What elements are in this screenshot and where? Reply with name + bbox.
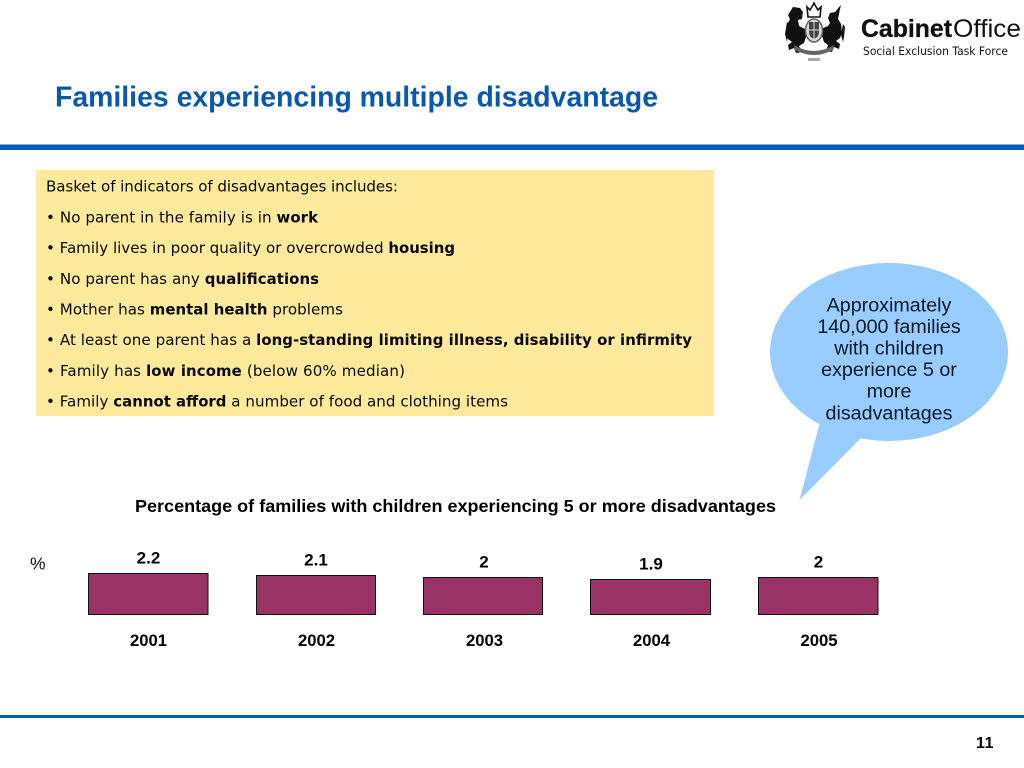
indicator: work: • No parent in the family is in work — [46, 208, 319, 226]
panel heading: Basket of indicators of disadvantages includes: — [46, 178, 398, 196]
right tail — [841, 24, 845, 42]
bottom rule — [0, 715, 1024, 718]
bar: 2005: 2005 — [800, 631, 838, 650]
callout text: experience 5 or — [821, 359, 957, 381]
title: Families experiencing multiple disadvantage — [55, 82, 658, 114]
logo wordmark: Office — [953, 15, 1021, 43]
bar: 2004: 2004 — [633, 631, 671, 650]
bar: 2001: 2001 — [130, 631, 167, 650]
indicator: qualifications: • No parent has any qualifications — [46, 270, 319, 288]
bar chart — [30, 548, 878, 650]
bar: 2002: 2002 — [298, 631, 335, 650]
callout text: more — [867, 381, 911, 403]
callout text: Approximately — [827, 295, 952, 317]
shield and garter — [806, 19, 822, 42]
logo subtitle: Social Exclusion Task Force — [863, 44, 1008, 58]
callout text: 140,000 families — [817, 316, 961, 338]
bar: 2005 — [758, 552, 878, 650]
bar: 2004 — [590, 554, 710, 650]
bar: 2005: 2 — [814, 552, 823, 572]
unicorn — [822, 5, 842, 52]
icon: royal coat of arms — [785, 3, 845, 61]
bar: 2002 — [256, 550, 376, 650]
callout: speech bubble — [770, 263, 1008, 500]
bar: 2003: 2 — [479, 552, 489, 572]
bar: 2004: 1.9 — [639, 554, 663, 574]
crown — [807, 3, 821, 17]
top rule — [0, 144, 1024, 150]
indicator: housing: • Family lives in poor quality or overcrowded housing — [46, 239, 455, 257]
lion — [786, 7, 806, 53]
bar: 2001: 2.2 — [137, 548, 160, 568]
indicator: illness: • At least one parent has a long-standing limiting illness, disability or infirmity — [46, 331, 692, 349]
motto scroll — [794, 45, 834, 55]
logo wordmark — [861, 15, 1021, 43]
bar: 2003 — [424, 552, 542, 650]
left tail — [785, 22, 789, 42]
axis unit: % — [30, 554, 46, 574]
callout text: with children — [833, 338, 944, 360]
callout text — [817, 295, 961, 425]
bar: 2001 — [88, 548, 208, 650]
indicator: low income: • Family has low income (below 60% median) — [46, 362, 405, 380]
bar: 2002: 2.1 — [304, 550, 328, 570]
logo: Cabinet Office — [785, 3, 1021, 61]
indicator: food and clothing: • Family cannot afford a number of food and clothing items — [46, 392, 508, 410]
bar: 2003: 2003 — [466, 631, 503, 650]
page number: 11 — [976, 735, 994, 752]
indicator: mental health: • Mother has mental health problems — [46, 300, 343, 318]
chart heading: Percentage of families with children experiencing 5 or more disadvantages — [135, 496, 776, 516]
callout text: disadvantages — [826, 403, 953, 425]
panel: basket of indicators — [36, 170, 714, 416]
logo wordmark: Cabinet — [861, 15, 953, 43]
